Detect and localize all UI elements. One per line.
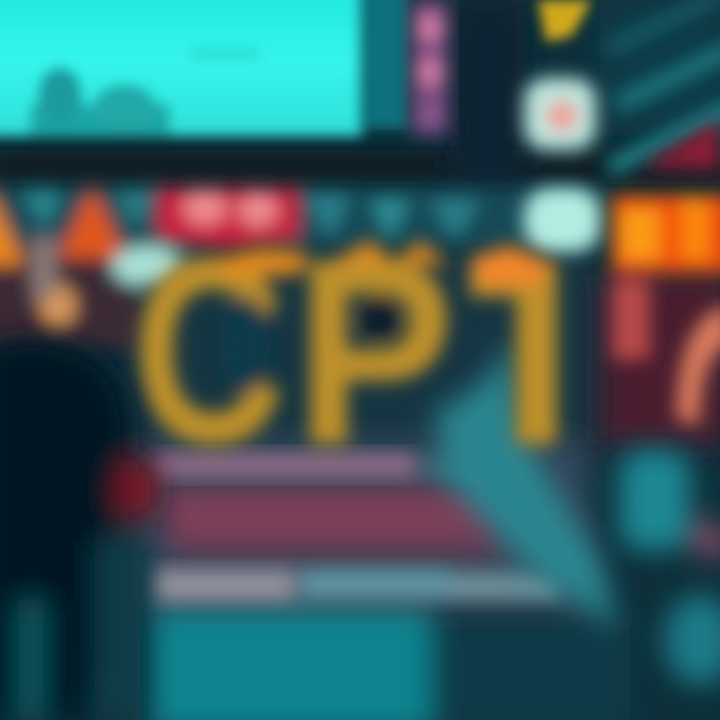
letter I: I <box>500 206 573 499</box>
panel: cyan billboard <box>0 0 408 138</box>
icon: round white lamps <box>524 78 600 252</box>
teal road swoosh <box>435 335 720 685</box>
text block: blurred middle line <box>175 498 485 536</box>
text block: blurred pink line <box>155 452 530 478</box>
panel: bunting strip <box>0 185 610 348</box>
heading: large CPI lettering <box>133 205 573 499</box>
icon: yellow sign <box>538 0 592 42</box>
letter I top bar <box>470 263 530 297</box>
panel: orange neon shop <box>600 275 720 445</box>
neon signs <box>612 195 720 425</box>
teal diagonal stripes <box>603 0 720 176</box>
text block: blurred bottom line <box>155 568 560 602</box>
red awning <box>640 118 720 170</box>
letter C: C <box>133 205 284 497</box>
dark counters <box>219 296 400 393</box>
dark horizontal beam <box>0 0 720 190</box>
pink vertical sign <box>412 0 448 135</box>
silhouette: person <box>0 338 160 720</box>
orange letter tops <box>215 240 550 285</box>
letter P: P <box>296 205 453 499</box>
panel: lower street <box>130 250 630 720</box>
